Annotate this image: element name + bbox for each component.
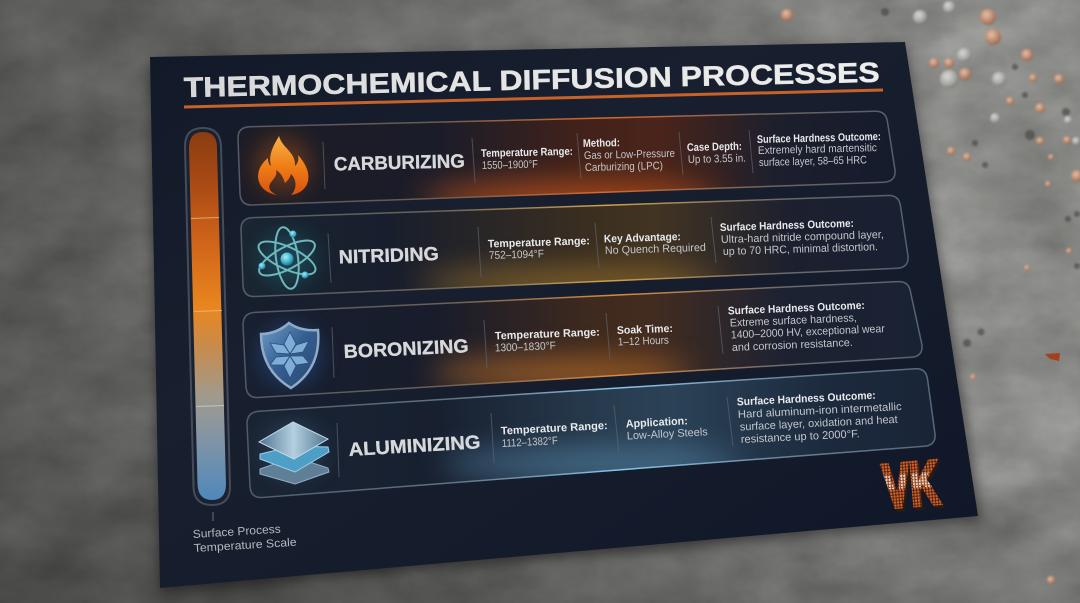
temperature range: Temperature Range:: [488, 235, 590, 250]
process name: CARBURIZING: [334, 151, 465, 175]
process name: ALUMINIZING: [348, 432, 481, 461]
method: Method:: [583, 137, 620, 150]
application: Low-Alloy Steels: [627, 426, 709, 442]
surface hardness outcome: 1400–2000 HV, exceptional wear: [731, 323, 885, 341]
case depth: [687, 141, 746, 166]
case depth: Up to 3.55 in.: [688, 153, 746, 166]
method: Carburizing (LPC): [585, 160, 663, 174]
temperature range: [501, 420, 608, 450]
panel: boronizing: [243, 282, 922, 398]
scale tube: [185, 128, 230, 505]
surface hardness outcome: Surface Hardness Outcome:: [737, 390, 876, 408]
surface hardness outcome: up to 70 HRC, minimal distortion.: [723, 241, 878, 258]
key advantage: [604, 231, 706, 257]
scale fill: [189, 132, 226, 500]
scale markers: [191, 218, 222, 312]
surface hardness outcome: Surface Hardness Outcome:: [728, 300, 865, 317]
temperature range: 1550–1900°F: [482, 159, 538, 172]
scattered metal particles: [781, 1, 1080, 584]
temperature range: [495, 326, 600, 354]
surface hardness outcome: surface layer, 58–65 HRC: [759, 154, 867, 169]
temperature range: Temperature Range:: [481, 146, 573, 160]
logo: VK: VK: [882, 451, 944, 525]
soak time: Soak Time:: [617, 323, 673, 337]
surface hardness outcome: [737, 390, 902, 446]
poster board: [150, 42, 978, 588]
surface hardness outcome: Surface Hardness Outcome:: [720, 218, 854, 234]
logo: VK: [880, 458, 945, 512]
key advantage: Key Advantage:: [604, 231, 681, 245]
case depth: Case Depth:: [687, 141, 742, 154]
temperature range: 1112–1382°F: [502, 435, 558, 450]
temperature range: 1300–1830°F: [495, 340, 556, 354]
temperature scale: [185, 128, 297, 555]
surface hardness outcome: [757, 131, 881, 169]
icon: stacked layers: [259, 422, 329, 484]
title underline: [184, 90, 883, 107]
temperature range: [488, 235, 590, 262]
method: Gas or Low-Pressure: [584, 148, 675, 162]
scale label: Temperature Scale: [193, 537, 297, 555]
panel: carburizing: [238, 111, 895, 212]
panel: aluminizing: [247, 369, 935, 498]
temperature range: 752–1094°F: [489, 248, 544, 262]
title: THERMOCHEMICAL DIFFUSION PROCESSES: [183, 57, 880, 103]
icon: shield: [261, 323, 318, 388]
logo: VK: VK: [880, 448, 942, 522]
temperature range: Temperature Range:: [501, 420, 608, 437]
process name: BORONIZING: [343, 336, 469, 363]
scale label: [192, 524, 297, 555]
method: [583, 137, 675, 174]
application: Application:: [626, 415, 688, 430]
surface hardness outcome: surface layer, oxidation and heat: [740, 414, 898, 433]
surface hardness outcome: and corrosion resistance.: [732, 337, 853, 354]
temperature range: [481, 146, 573, 172]
process name: NITRIDING: [338, 244, 439, 268]
surface hardness outcome: Extremely hard martensitic: [758, 142, 877, 157]
poster shadow: [150, 47, 982, 593]
soak time: 1–12 Hours: [618, 335, 670, 348]
surface hardness outcome: Surface Hardness Outcome:: [757, 131, 881, 146]
surface hardness outcome: resistance up to 2000°F.: [741, 428, 860, 446]
key advantage: No Quench Required: [605, 242, 706, 257]
icon: atom: [254, 226, 320, 290]
panel: nitriding: [241, 195, 908, 297]
application: [626, 415, 709, 442]
surface hardness outcome: [720, 218, 884, 258]
surface hardness outcome: Extreme surface hardness,: [730, 312, 857, 329]
temperature range: Temperature Range:: [495, 326, 600, 342]
scale label: Surface Process: [192, 524, 281, 541]
soak time: [617, 323, 673, 348]
surface hardness outcome: [728, 300, 885, 354]
surface hardness outcome: Ultra-hard nitride compound layer,: [721, 229, 884, 246]
surface hardness outcome: Hard aluminum-iron intermetallic: [738, 401, 902, 421]
icon: flame: [258, 136, 308, 195]
